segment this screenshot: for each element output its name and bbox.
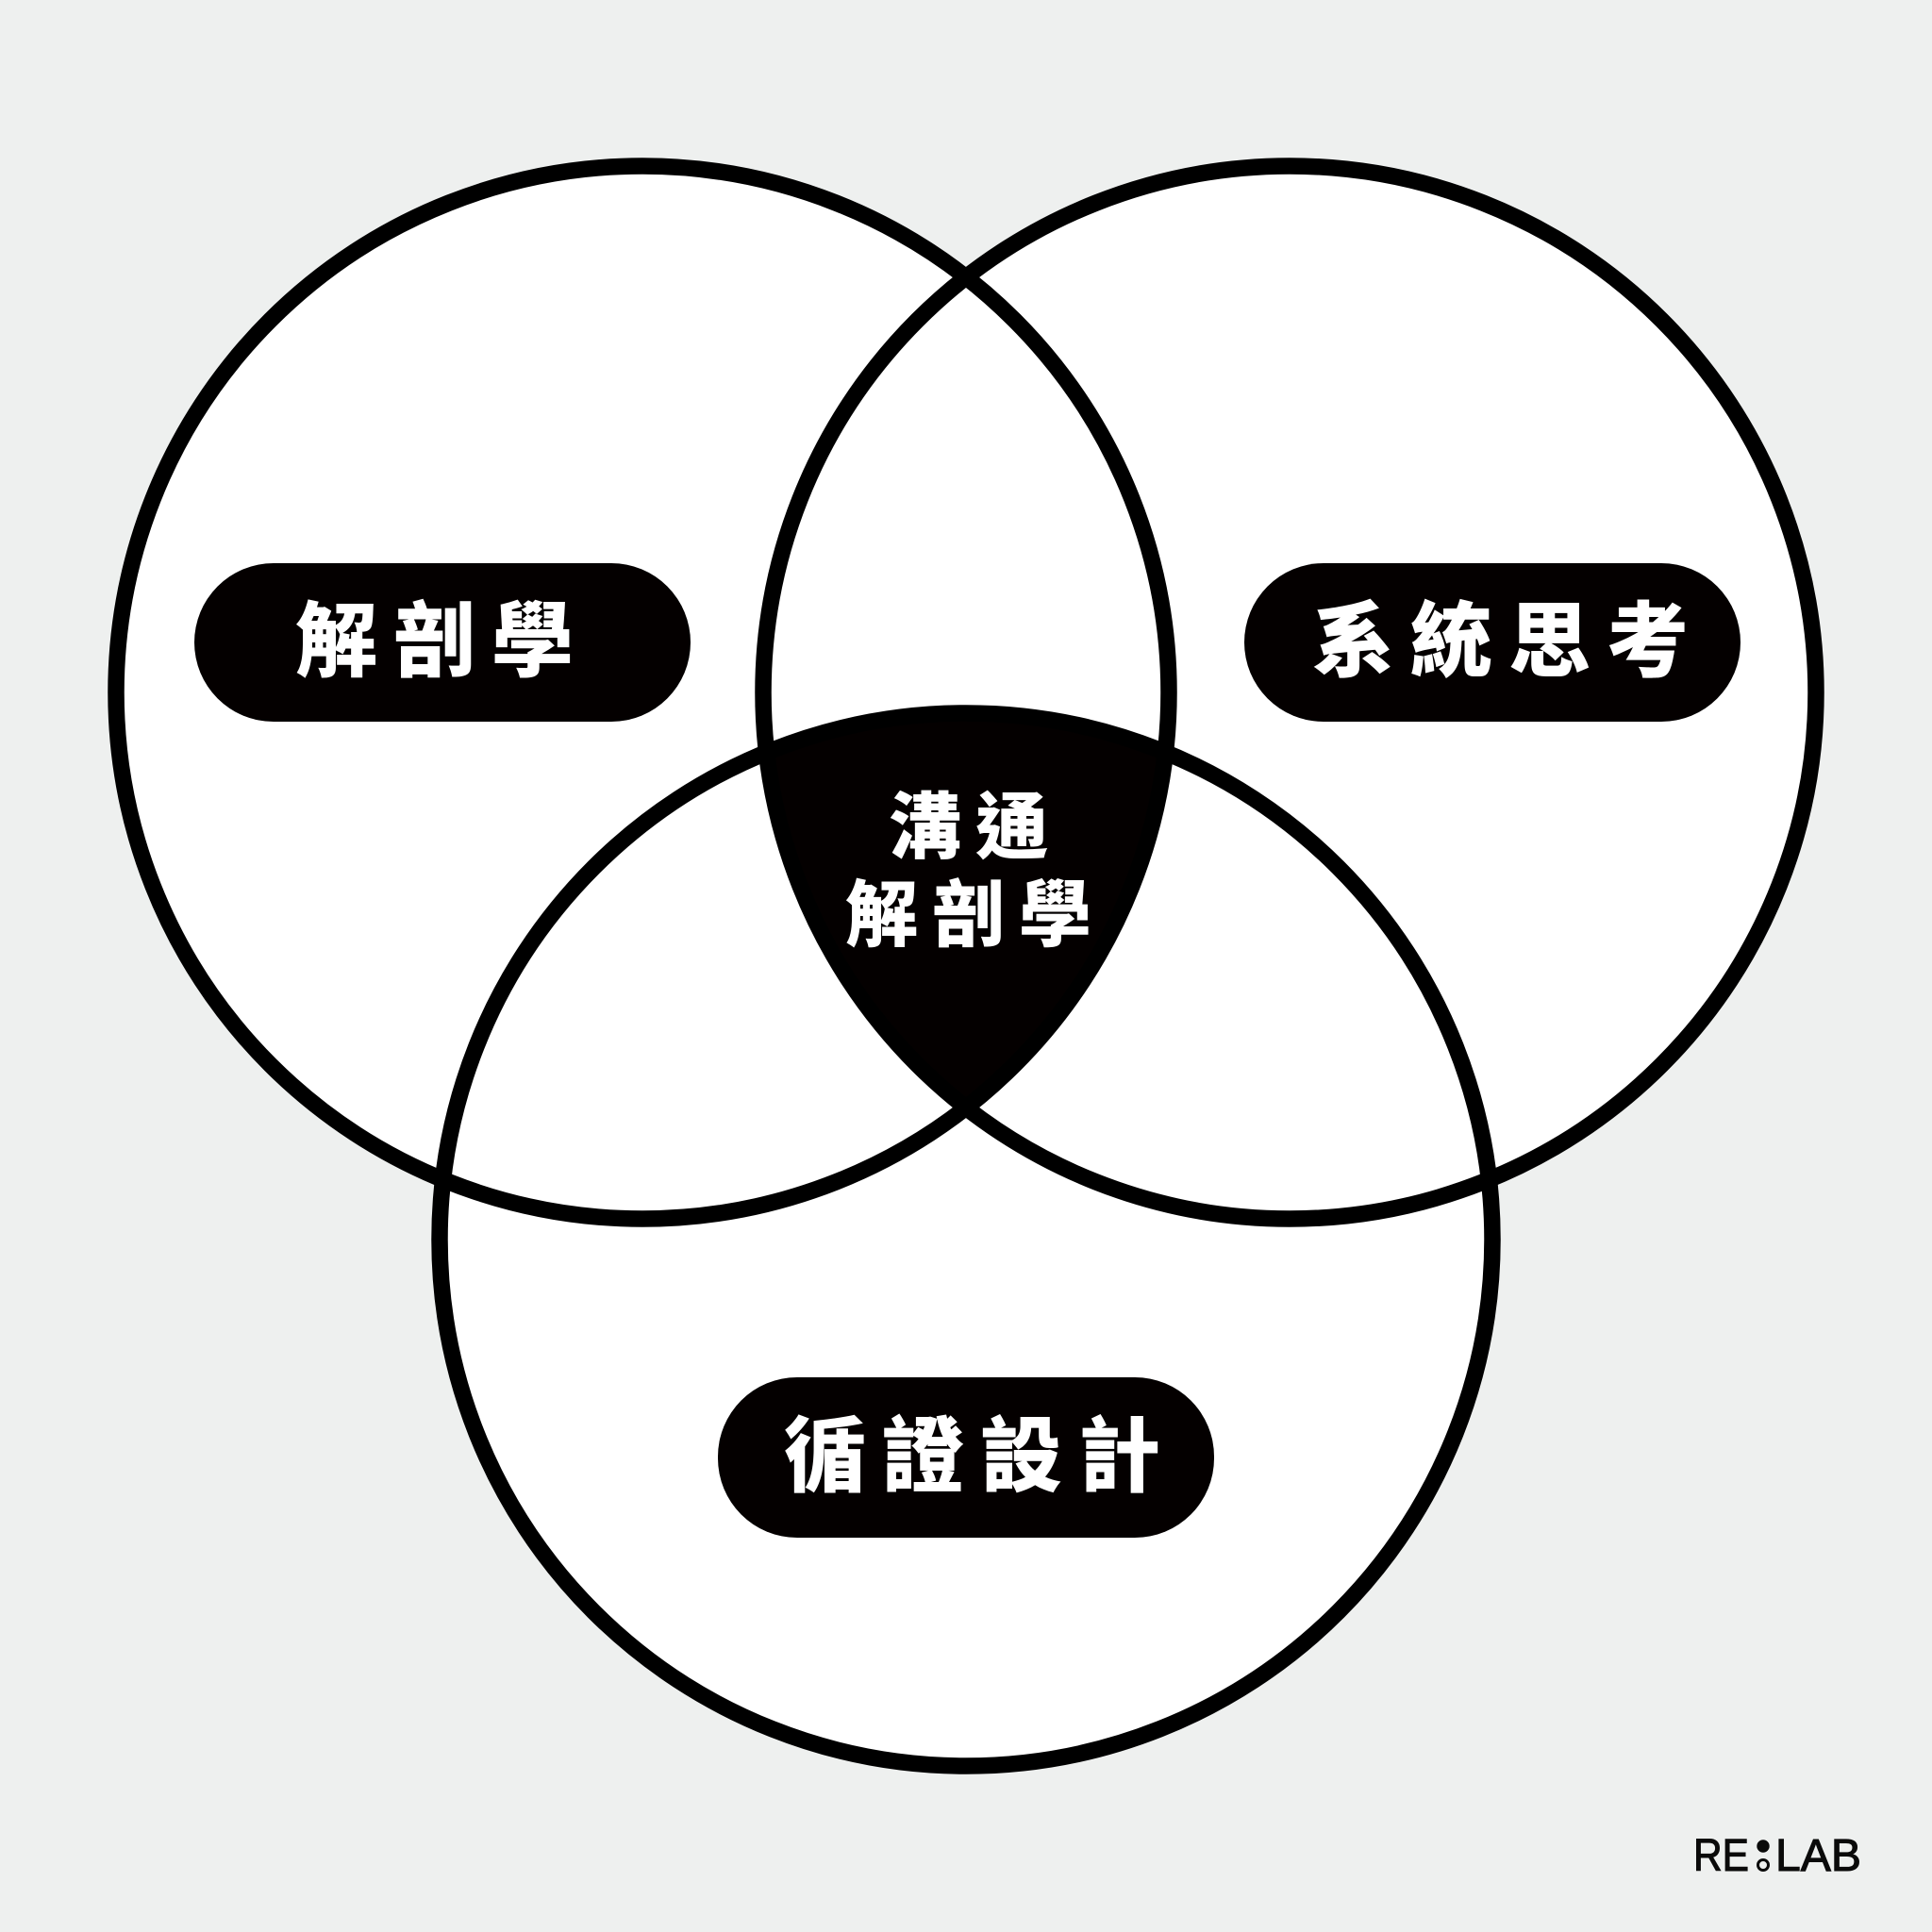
pill: systems thinking (1244, 563, 1740, 722)
white circle fills (116, 166, 1816, 1766)
center label: 解剖學 (845, 875, 1091, 957)
center intersection: black region (775, 721, 1157, 1097)
center label (845, 788, 1091, 957)
logo: RE:LAB: LAB (1775, 1831, 1861, 1881)
pill: anatomy (194, 563, 691, 722)
pill: evidence-based design: 循證設計 (784, 1411, 1160, 1503)
pill: anatomy: 解剖學 (295, 596, 574, 688)
logo: RE:LAB (1693, 1831, 1861, 1881)
logo: RE:LAB: RE (1693, 1831, 1749, 1881)
center label: 溝通 (889, 788, 1048, 869)
pill: evidence-based design (718, 1377, 1214, 1538)
circle outlines (116, 166, 1816, 1766)
pill: systems thinking: 系統思考 (1312, 596, 1689, 688)
